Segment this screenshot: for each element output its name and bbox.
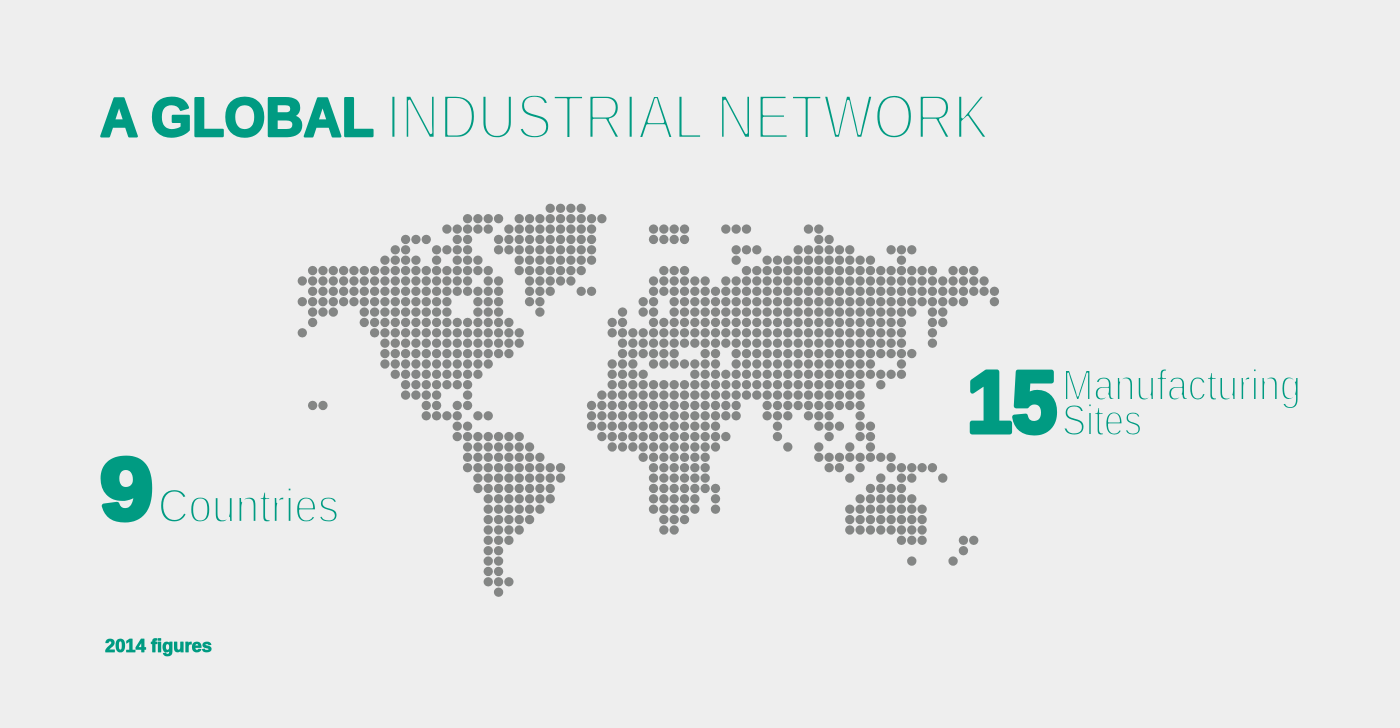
stat: 15 manufacturing sites — [967, 354, 1301, 451]
stat: 15 manufacturing sites: Manufacturing — [1062, 361, 1301, 410]
stat: 15 manufacturing sites: 15 — [967, 354, 1057, 451]
stat: 9 countries — [100, 441, 339, 538]
stat: 9 countries: Countries — [158, 479, 339, 532]
title: INDUSTRIAL NETWORK — [386, 83, 989, 153]
stat: 15 manufacturing sites: Sites — [1062, 396, 1142, 445]
title: A GLOBAL — [100, 86, 374, 148]
dotted world map — [302, 208, 995, 592]
stat: 9 countries: 9 — [100, 441, 153, 538]
footnote: 2014 figures — [105, 636, 212, 656]
title — [100, 83, 989, 153]
